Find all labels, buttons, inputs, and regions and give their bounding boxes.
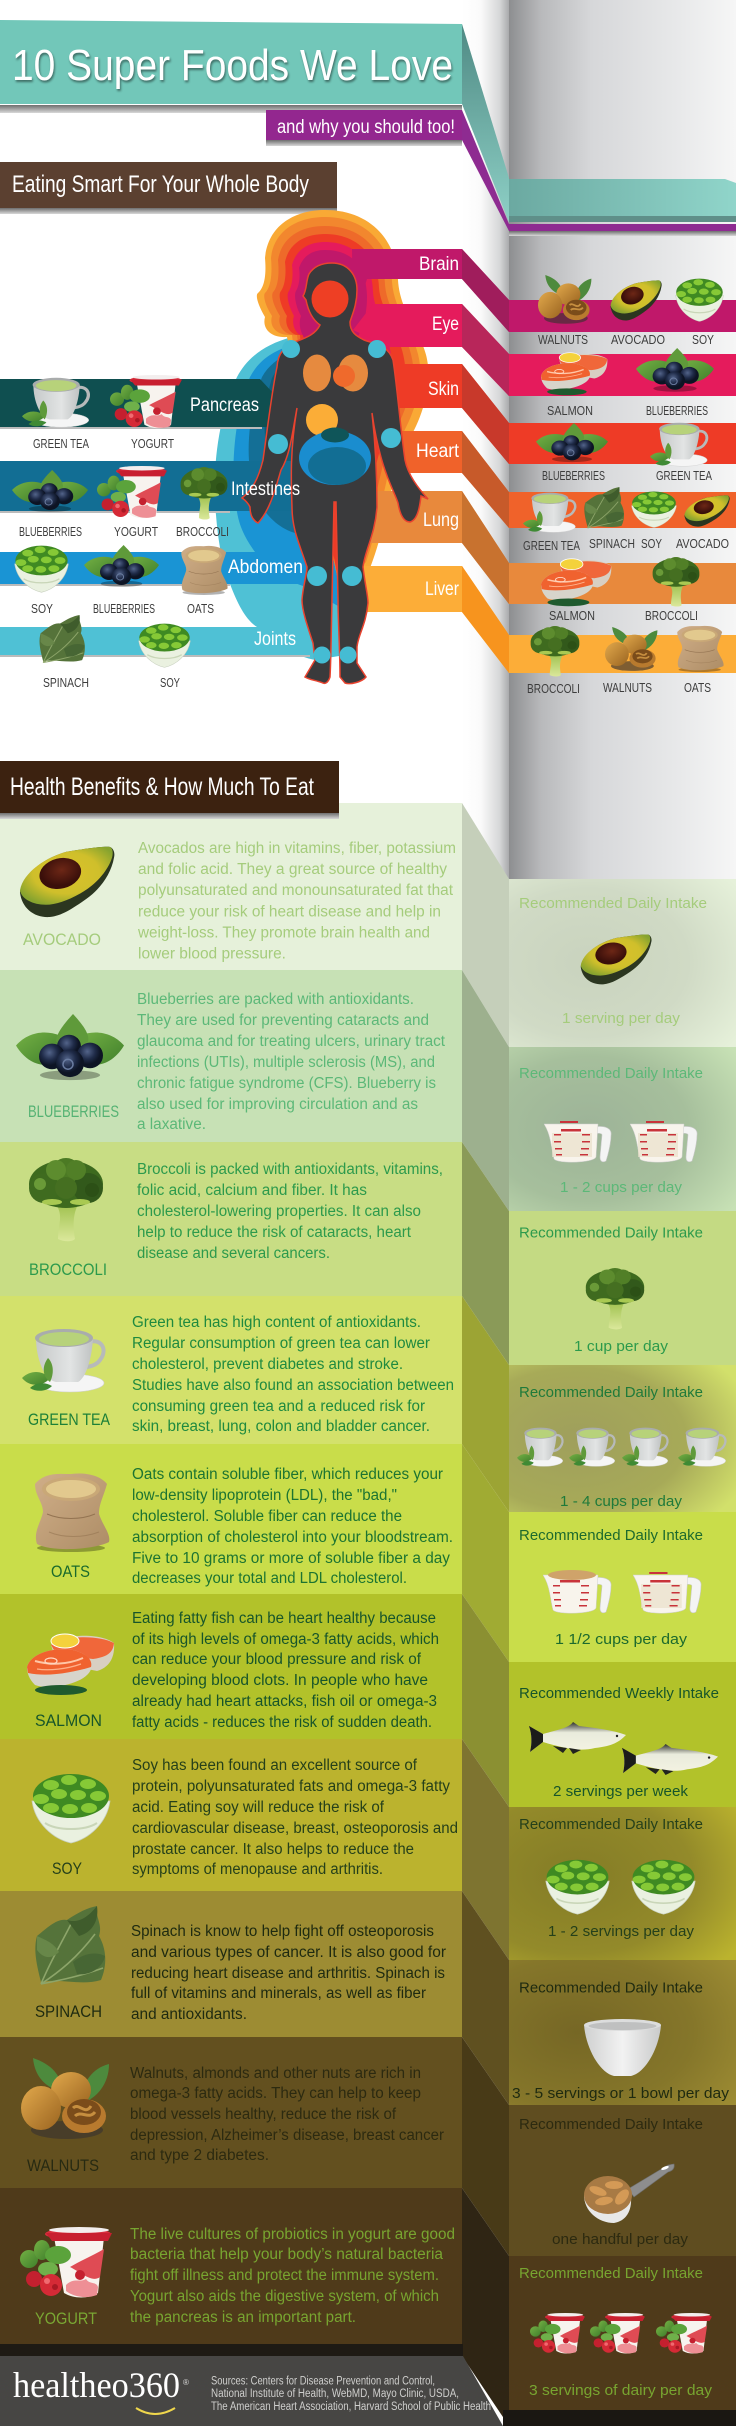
text: yogurt benefits: fight off illness and protect the immune system. [130,2267,439,2284]
radiating blue silhouette layers, lower body [215,337,360,660]
panel: soy benefits [0,1739,462,1891]
text: blueberries benefits: They are used for preventing cataracts and [137,1012,429,1029]
panel: walnuts benefits [0,2037,462,2188]
icon: walnuts [21,2058,109,2139]
text: oats benefits: Oats contain soluble fiber, which reduces your [132,1466,443,1483]
band: lung [370,491,736,604]
panel: avocado benefits [0,803,462,970]
text: spinach benefits: Spinach is know to help fight off osteoporosis [131,1923,434,1940]
foods for the joints [40,615,190,690]
heading: eating smart: Eating Smart For Your Whole Body [12,171,309,198]
foods for the eye: SALMON [547,404,593,418]
text: spinach benefits: reducing heart disease and arthritis. Spinach is [131,1965,445,1982]
text: soy benefits [132,1757,458,1878]
text: spinach benefits: full of vitamins and minerals, as well as fiber [131,1985,426,2002]
band: heart: Heart [416,441,460,462]
text: walnuts benefits: omega-3 fatty acids. They can help to keep [130,2085,421,2102]
human body figure with organs [242,263,428,684]
panel: avocado intake [509,879,736,1047]
text: avocado benefits [137,840,456,962]
band: pancreas: Pancreas [190,395,259,416]
panel: green tea intake: 1 - 4 cups per day [560,1493,682,1510]
text: walnuts benefits: Walnuts, almonds and other nuts are rich in [130,2065,421,2082]
icon: salmon [27,1634,114,1695]
text: oats benefits: absorption of cholesterol into your bloodstream. [132,1529,453,1546]
panel: oats intake [509,1512,736,1662]
text: salmon benefits: Eating fatty fish can be heart healthy because [132,1610,436,1627]
label: avocado: AVOCADO [23,930,101,949]
foods for the intestines [12,466,229,539]
text: oats benefits: low-density lipoprotein (LDL), the "bad," [132,1487,397,1504]
text: blueberries benefits: also used for improving circulation and as [137,1096,418,1113]
sources [211,2376,491,2413]
icon: avocado [20,847,114,917]
panel: spinach intake: 3 - 5 servings or 1 bowl per day [512,2085,730,2102]
text: avocado benefits: and folic acid. They a great source of healthy [138,861,447,878]
text: soy benefits: Soy has been found an excellent source of [132,1757,418,1774]
icon: spinach [35,1906,105,1984]
text: salmon benefits [132,1610,439,1731]
panel: broccoli intake: Recommended Daily Intake [519,1224,703,1242]
heading: health benefits: Health Benefits & How Much To Eat [10,773,314,801]
text: avocado benefits: reduce your risk of heart disease and help in [138,904,441,920]
foods for the pancreas: GREEN TEA [33,437,90,451]
panel: blueberries intake: Recommended Daily Intake [519,1065,703,1082]
foods for the pancreas [22,375,182,451]
panel: blueberries benefits [0,970,462,1142]
text: oats benefits: decreases your total and LDL cholesterol. [132,1570,407,1587]
subtitle ribbon [266,110,736,236]
angled side wall of the benefits stack [462,803,509,2426]
panel: broccoli benefits [0,1142,462,1296]
band: brain: Brain [419,254,459,275]
band: heart [395,431,736,528]
foods for the skin [536,423,713,483]
text: walnuts benefits [130,2065,444,2164]
band: lung: Lung [423,510,459,531]
band: liver [362,566,736,673]
panel: yogurt intake [509,2256,736,2410]
foods for the eye: BLUEBERRIES [646,404,708,418]
foods for the brain: AVOCADO [611,333,665,347]
text: yogurt benefits: the pancreas is an important part. [130,2309,356,2326]
text: avocado benefits: weight-loss. They promote brain health and [137,924,430,942]
text: broccoli benefits: cholesterol-lowering properties. It can also [137,1203,421,1220]
icon: blueberries [16,1014,124,1080]
foods for the liver: OATS [684,681,711,695]
sources: National Institute of Health, WebMD, Mayo Clinic, USDA, [211,2388,459,2400]
panel: green tea intake: Recommended Daily Intake [519,1384,703,1401]
foods for the brain: SOY [692,333,715,347]
text: salmon benefits: can reduce your blood pressure and risk of [132,1651,422,1668]
title ribbon: 10 Super Foods We Love [12,41,453,90]
heading: eating smart [0,162,337,214]
panel: oats intake: 1 1/2 cups per day [555,1631,688,1648]
label: oats: OATS [51,1562,90,1581]
label: yogurt: YOGURT [35,2309,97,2328]
foods for the brain: WALNUTS [538,333,588,347]
icon: yogurt [20,2227,112,2298]
band: brain [352,249,736,332]
text: yogurt benefits [130,2226,455,2326]
radiating orange and pink head profile layers [257,210,428,590]
text: blueberries benefits: Blueberries are packed with antioxidants. [137,991,414,1008]
foods for the liver [527,626,724,696]
text: avocado benefits: polyunsaturated and monounsaturated fat that [138,882,454,899]
band: abdomen [0,552,310,586]
panel: walnuts intake [509,2105,736,2256]
panel: avocado intake: 1 serving per day [562,1010,680,1027]
panel: green tea intake [509,1365,736,1512]
back wall of the folded page [462,0,736,880]
panel: oats intake: Recommended Daily Intake [519,1527,703,1544]
text: soy benefits: protein, polyunsaturated fats and omega-3 fatty [132,1778,450,1795]
panel: salmon intake: 2 servings per week [553,1783,688,1800]
band: eye [353,304,736,396]
foods for the intestines: BLUEBERRIES [19,525,82,539]
band: skin: Skin [428,379,459,400]
foods for the heart: GREEN TEA [523,539,581,553]
band: joints: Joints [254,629,296,650]
text: broccoli benefits: folic acid, calcium and fiber. It has [137,1182,367,1199]
panel: soy intake: 1 - 2 servings per day [548,1923,694,1940]
text: soy benefits: acid. Eating soy will reduce the risk of [132,1799,385,1816]
foods for the liver: WALNUTS [603,681,652,695]
text: broccoli benefits [137,1161,443,1262]
text: oats benefits: cholesterol. Soluble fiber can reduce the [132,1508,402,1525]
text: broccoli benefits: disease and several cancers. [137,1245,330,1262]
icon: green tea [22,1329,104,1392]
text: broccoli benefits: Broccoli is packed with antioxidants, vitamins, [137,1161,443,1178]
text: avocado benefits: Avocados are high in vitamins, fiber, potassium [138,840,456,857]
text: blueberries benefits: a laxative. [137,1116,206,1133]
subtitle ribbon: and why you should too! [277,117,455,138]
foods for the brain [538,275,723,347]
text: oats benefits: Five to 10 grams or more of soluble fiber a day [132,1550,450,1567]
sources: Sources: Centers for Disease Prevention and Control, [211,2376,435,2388]
foods for the eye [541,348,714,418]
label: intestines: Intestines [231,479,300,500]
text: salmon benefits: of its high levels of omega-3 fatty acids, which [132,1631,439,1648]
foods for the abdomen: SOY [31,602,54,616]
foods for the joints: SPINACH [43,676,89,690]
panel: blueberries intake [509,1047,736,1211]
text: salmon benefits: already had heart attacks, fish oil or omega-3 [132,1693,437,1710]
logo: healtheo360: healtheo360 [13,2365,180,2405]
band: skin [390,364,736,464]
foods for the lung: BROCCOLI [645,609,698,623]
footer [0,2344,736,2426]
text: green tea benefits [132,1314,454,1435]
panel: salmon intake: Recommended Weekly Intake [519,1685,719,1702]
panel: soy intake: Recommended Daily Intake [519,1816,703,1833]
panel: salmon intake [509,1662,736,1807]
band: eye: Eye [432,314,459,335]
label: green tea: GREEN TEA [28,1410,111,1429]
panel: spinach intake: Recommended Daily Intake [519,1980,703,1996]
foods for the intestines: YOGURT [114,525,158,539]
text: blueberries benefits: glaucoma and for treating ulcers, urinary tract [137,1033,446,1050]
panel: salmon benefits [0,1594,462,1739]
panel: spinach benefits [0,1891,462,2037]
text: green tea benefits: Studies have also found an association between [132,1377,454,1394]
text: green tea benefits: Green tea has high content of antioxidants. [132,1314,421,1331]
foods for the pancreas: YOGURT [131,437,174,451]
icon: oats [35,1473,109,1552]
band: liver: Liver [425,579,460,600]
foods for the skin: BLUEBERRIES [542,469,605,483]
text: blueberries benefits: infections (UTIs), multiple sclerosis (MS), and [137,1054,435,1071]
text: yogurt benefits: bacteria that help your body’s natural bacteria [130,2246,443,2263]
label: walnuts: WALNUTS [27,2156,99,2175]
text: blueberries benefits [137,991,446,1133]
label: blueberries: BLUEBERRIES [28,1102,119,1121]
panel: broccoli intake: 1 cup per day [574,1338,669,1355]
foods for the skin: GREEN TEA [656,469,713,483]
text: green tea benefits: cholesterol, prevent diabetes and stroke. [132,1356,403,1373]
panel: walnuts intake: one handful per day [552,2231,689,2248]
text: yogurt benefits: The live cultures of probiotics in yogurt are good [130,2226,455,2243]
foods for the abdomen [15,545,228,616]
text: salmon benefits: fatty acids - reduces the risk of sudden death. [132,1714,432,1731]
text: avocado benefits: lower blood pressure. [138,946,286,962]
foods for the heart [523,487,730,553]
panel: blueberries intake: 1 - 2 cups per day [560,1179,682,1196]
band: pancreas [0,379,274,429]
panel: spinach intake [509,1960,736,2105]
title ribbon [0,20,736,222]
icon: soy [32,1774,110,1843]
label: spinach: SPINACH [35,2002,102,2021]
text: green tea benefits: Regular consumption of green tea can lower [132,1335,430,1352]
panel: yogurt benefits [0,2188,462,2344]
heading: health benefits [0,761,339,819]
sources: The American Heart Association, Harvard School of Public Health [211,2401,491,2413]
text: yogurt benefits: Yogurt also aids the digestive system, of which [130,2288,439,2305]
panel: green tea benefits [0,1296,462,1444]
foods for the abdomen: BLUEBERRIES [93,602,155,616]
text: spinach benefits: and various types of cancer. It is also good for [131,1944,446,1961]
band: intestines [0,461,292,513]
foods for the abdomen: OATS [187,602,214,616]
foods for the heart: SPINACH [589,537,635,551]
text: soy benefits: prostate cancer. It also helps to reduce the [132,1841,414,1858]
text: green tea benefits: skin, breast, lung, colon and bladder cancer. [132,1418,430,1435]
panel: broccoli intake [509,1211,736,1365]
label: salmon: SALMON [35,1711,102,1730]
foods for the heart: AVOCADO [676,537,729,551]
text: blueberries benefits: chronic fatigue syndrome (CFS). Blueberry is [137,1075,436,1092]
band: joints [0,627,318,657]
panel: yogurt intake: Recommended Daily Intake [519,2265,703,2282]
foods for the heart: SOY [641,537,663,551]
foods for the joints: SOY [160,676,180,690]
foods for the intestines: BROCCOLI [176,525,229,539]
band: abdomen: Abdomen [228,557,303,578]
text: spinach benefits [131,1923,446,2023]
panel: walnuts intake: Recommended Daily Intake [519,2116,703,2133]
text: walnuts benefits: and type 2 diabetes. [130,2147,269,2164]
text: salmon benefits: developing blood clots. In people who have [132,1672,428,1689]
text: spinach benefits: and antioxidants. [131,2006,247,2023]
panel: oats benefits [0,1444,462,1594]
panel: yogurt intake: 3 servings of dairy per day [529,2382,713,2399]
text: broccoli benefits: help to reduce the risk of cataracts, heart [137,1224,412,1241]
foods for the liver: BROCCOLI [527,682,580,696]
text: green tea benefits: consuming green tea and a reduced risk for [132,1398,425,1415]
text: oats benefits [132,1466,453,1587]
text: walnuts benefits: depression, Alzheimer’s disease, breast cancer [130,2127,444,2144]
text: walnuts benefits: blood vessels healthy, reduce the risk of [130,2106,397,2123]
foods for the lung: SALMON [549,609,595,623]
text: soy benefits: symptoms of menopause and arthritis. [132,1861,383,1878]
icon: broccoli [29,1158,103,1241]
label: soy: SOY [52,1859,82,1878]
panel: soy intake [509,1807,736,1960]
text: soy benefits: cardiovascular disease, breast, osteoporosis and [132,1820,458,1837]
label: broccoli: BROCCOLI [29,1260,107,1279]
panel: avocado intake: Recommended Daily Intake [519,895,707,912]
foods for the lung [541,557,699,623]
logo: healtheo360: ® [183,2378,189,2387]
